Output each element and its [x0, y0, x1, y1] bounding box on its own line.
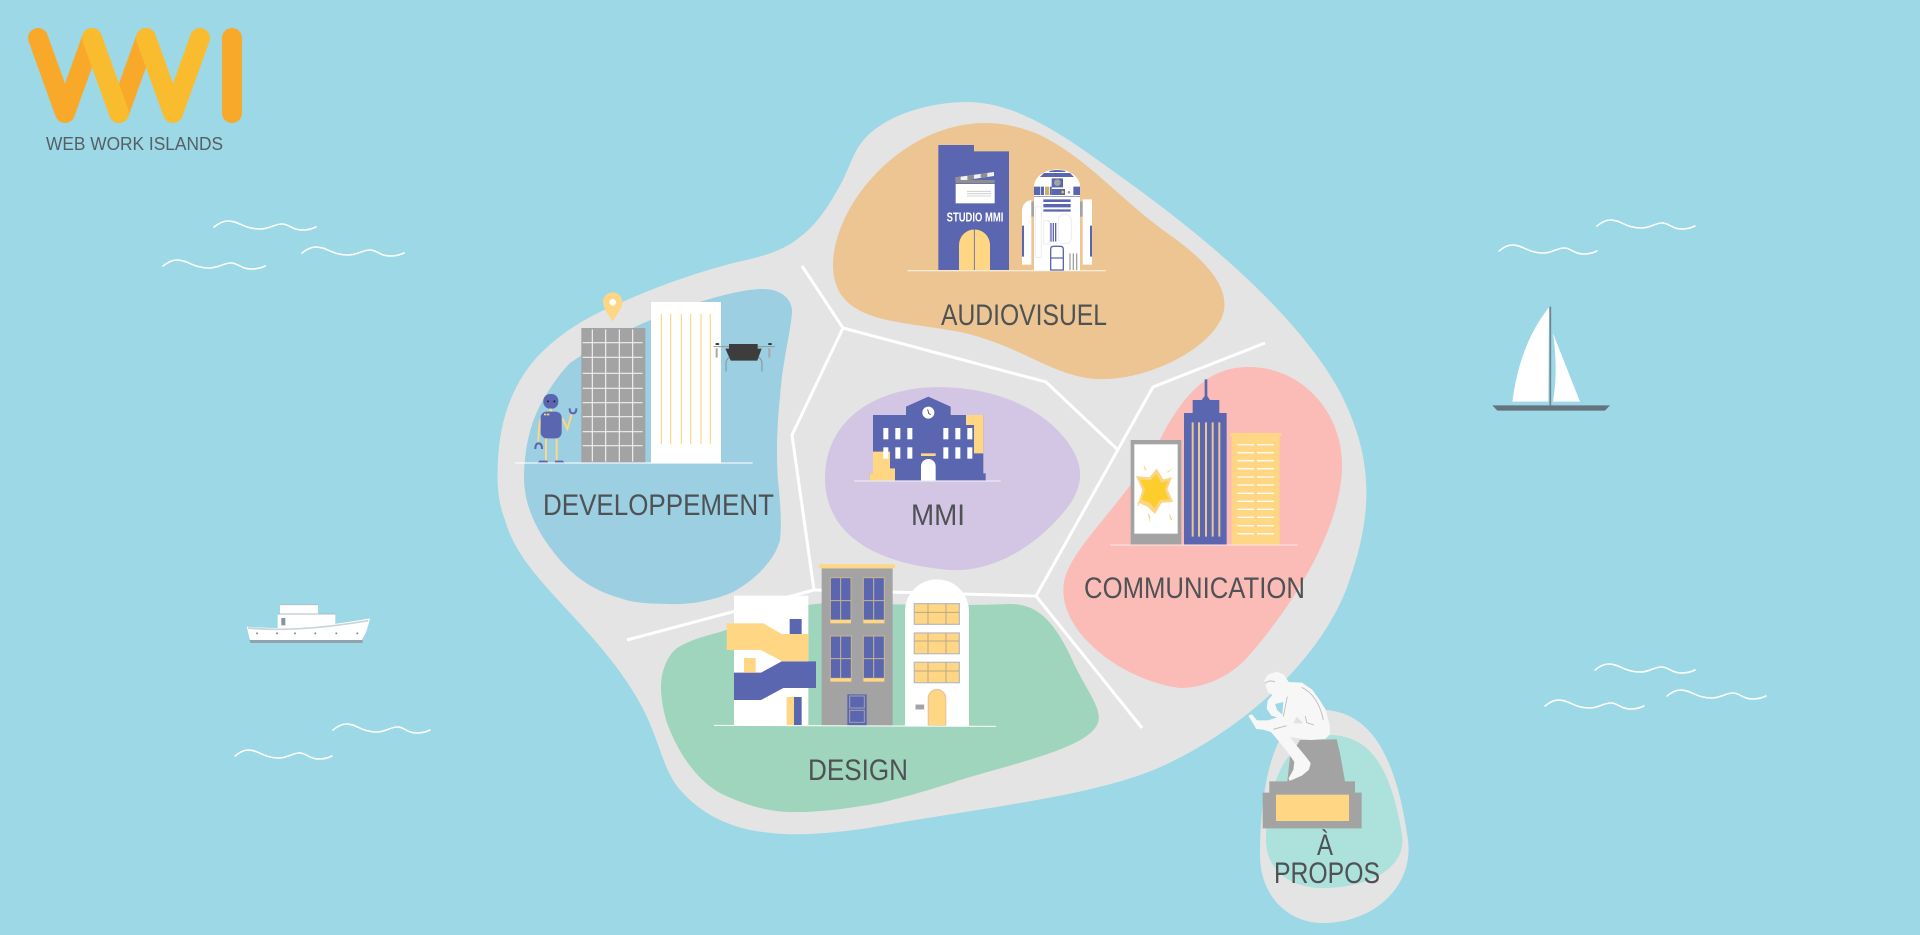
middle building: [819, 564, 895, 725]
ground: [907, 269, 1106, 273]
label: communication: COMMUNICATION: [1084, 572, 1305, 605]
panel: developpement: [515, 289, 792, 604]
label: design: DESIGN: [808, 754, 908, 787]
billboard: [1131, 440, 1181, 545]
logo: WEB WORK ISLANDS: [46, 134, 223, 154]
studio building: [938, 145, 1009, 270]
panel: a propos: [1249, 672, 1380, 890]
clapper: [956, 172, 995, 203]
studio text: STUDIO MMI: [947, 211, 1003, 225]
waves: [163, 220, 1766, 759]
r2d2: [1022, 169, 1092, 271]
logo: [38, 38, 232, 154]
label: propos: PROPOS: [1274, 857, 1380, 890]
white tower: [651, 302, 721, 463]
label: a: À: [1317, 829, 1333, 862]
panel: design: [661, 564, 1099, 812]
skyscraper: [1184, 379, 1227, 545]
statue: [1249, 672, 1362, 828]
school building: [869, 397, 986, 481]
roads: [627, 266, 1265, 728]
ship: [247, 604, 370, 643]
small island: [1260, 710, 1409, 923]
drone: [713, 343, 775, 372]
label: audiovisuel: AUDIOVISUEL: [941, 299, 1107, 332]
panel: audiovisuel: [833, 123, 1224, 379]
left building: [727, 596, 816, 725]
label: mmi: MMI: [911, 499, 965, 532]
right building: [905, 579, 969, 726]
robot: [535, 394, 576, 463]
panel: mmi: [825, 387, 1080, 570]
panel: communication: [1063, 367, 1342, 688]
main island: [498, 102, 1366, 834]
yellow building: [1230, 433, 1281, 545]
label: developpement: DEVELOPPEMENT: [543, 489, 774, 522]
grey building: [581, 328, 645, 463]
studio door: [959, 229, 990, 270]
icon: pin: [603, 292, 622, 322]
sailboat: [1492, 307, 1610, 411]
